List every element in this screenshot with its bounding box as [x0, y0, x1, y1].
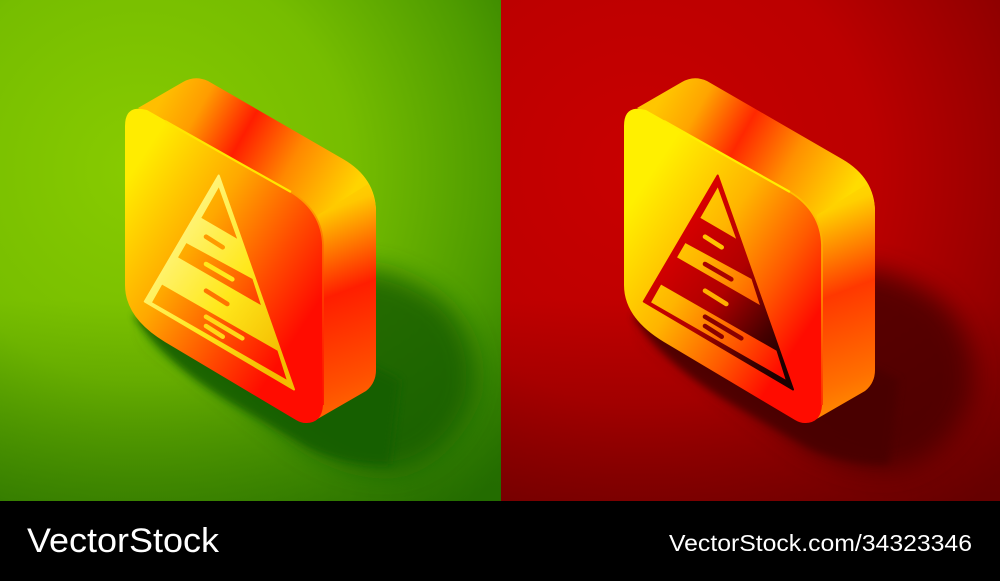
button right side: [805, 184, 875, 423]
icon: red panel square button with pyramid: [624, 78, 875, 423]
panel: red background: [501, 0, 1000, 501]
button top side: [138, 78, 376, 245]
pyramid chart icon: [644, 176, 793, 390]
button top side: [637, 78, 875, 245]
front face corner bevel: [291, 192, 323, 405]
pyramid chart icon: [145, 176, 294, 390]
image id: VectorStock.com/34323346: [669, 530, 972, 556]
front face corner bevel: [790, 192, 822, 405]
icon shadow: red panel: [632, 268, 974, 470]
button right side: [306, 184, 376, 423]
footer bar: [0, 500, 1000, 581]
brand wordmark: VectorStock: [27, 522, 220, 560]
front face top bevel: [664, 121, 790, 192]
pyramid labels: [206, 237, 242, 338]
icon shadow: green panel: [133, 268, 475, 470]
pyramid labels: [705, 237, 741, 338]
icon: green panel square button with pyramid: [125, 78, 376, 423]
front face top bevel: [165, 121, 291, 192]
panel: green background: [0, 0, 501, 501]
button front face: [624, 109, 822, 423]
button front face: [125, 109, 323, 423]
